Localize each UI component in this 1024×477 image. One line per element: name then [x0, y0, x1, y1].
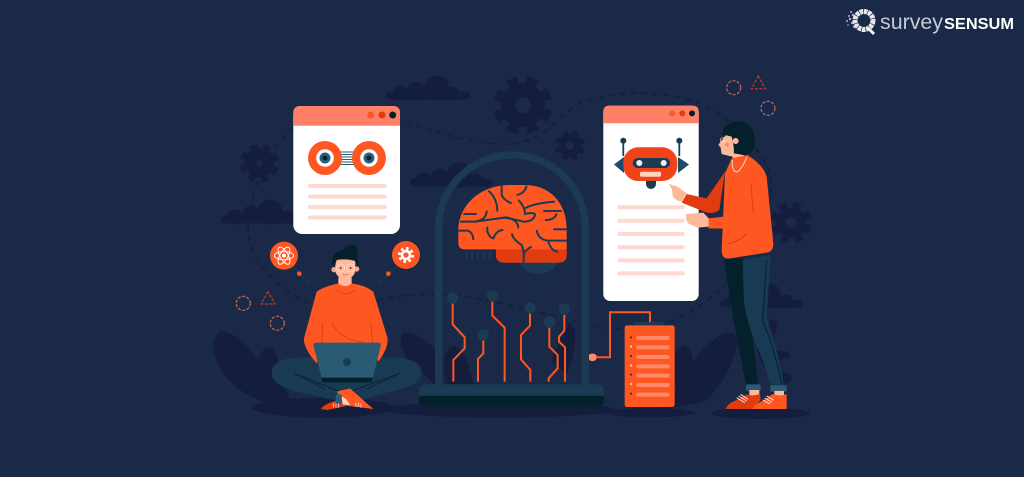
brain — [458, 185, 567, 274]
connector plug — [588, 354, 597, 361]
gear: small top — [555, 130, 585, 161]
glass dome outline — [439, 155, 585, 388]
back arm and pointing hand — [682, 172, 725, 213]
logo icon — [846, 11, 874, 34]
woman presenting — [669, 121, 787, 409]
circuit traces — [447, 290, 570, 382]
head — [331, 245, 359, 279]
icon: atom bubble — [270, 242, 310, 285]
decorative dashed shapes: right — [727, 76, 775, 115]
cloud: left — [221, 200, 305, 224]
feet — [321, 388, 373, 410]
server rack — [625, 322, 675, 407]
cloud: right — [720, 284, 803, 308]
text placeholder lines — [308, 184, 387, 220]
front arm and hand — [708, 213, 767, 229]
window dots — [669, 110, 695, 116]
legs and shoes — [724, 255, 787, 409]
logo wordmark: survey — [880, 11, 944, 34]
window dots — [367, 112, 396, 118]
cloud: behind jar — [410, 162, 493, 188]
hair — [722, 121, 755, 155]
upper body — [669, 121, 773, 259]
logo: surveySENSUM — [846, 11, 1014, 34]
logo: surveySENSUM: SENSUM — [944, 16, 1014, 33]
card header — [293, 106, 400, 126]
gear: right — [771, 203, 811, 242]
orange sweater — [304, 283, 388, 363]
card header — [603, 106, 699, 123]
sweater — [722, 155, 773, 259]
icon: linked eyes — [308, 141, 386, 175]
plants and ground shadows: right — [605, 319, 810, 419]
gear: large top — [494, 76, 552, 134]
icon: robot — [614, 138, 689, 189]
card: eyes window — [293, 106, 400, 234]
dashed connector path — [248, 93, 771, 329]
bell jar with brain and circuits — [419, 155, 604, 407]
neck — [338, 277, 352, 288]
laptop — [313, 343, 381, 382]
gear: left — [239, 143, 280, 184]
card body — [293, 106, 400, 234]
plants and ground shadows: left — [213, 332, 615, 418]
card body — [603, 106, 699, 301]
leaves seen through the jar — [443, 322, 575, 407]
necklace — [732, 157, 747, 172]
cable to plug — [596, 312, 650, 357]
man with laptop — [270, 241, 422, 410]
text placeholder lines — [617, 205, 685, 275]
neck and face — [718, 135, 747, 165]
jar base — [419, 384, 604, 407]
card: chatbot window — [603, 106, 699, 301]
icon: gear bubble — [378, 241, 420, 284]
decorative dashed shapes: left — [236, 292, 284, 330]
crossed legs — [272, 358, 422, 403]
cloud: top center — [386, 76, 470, 100]
